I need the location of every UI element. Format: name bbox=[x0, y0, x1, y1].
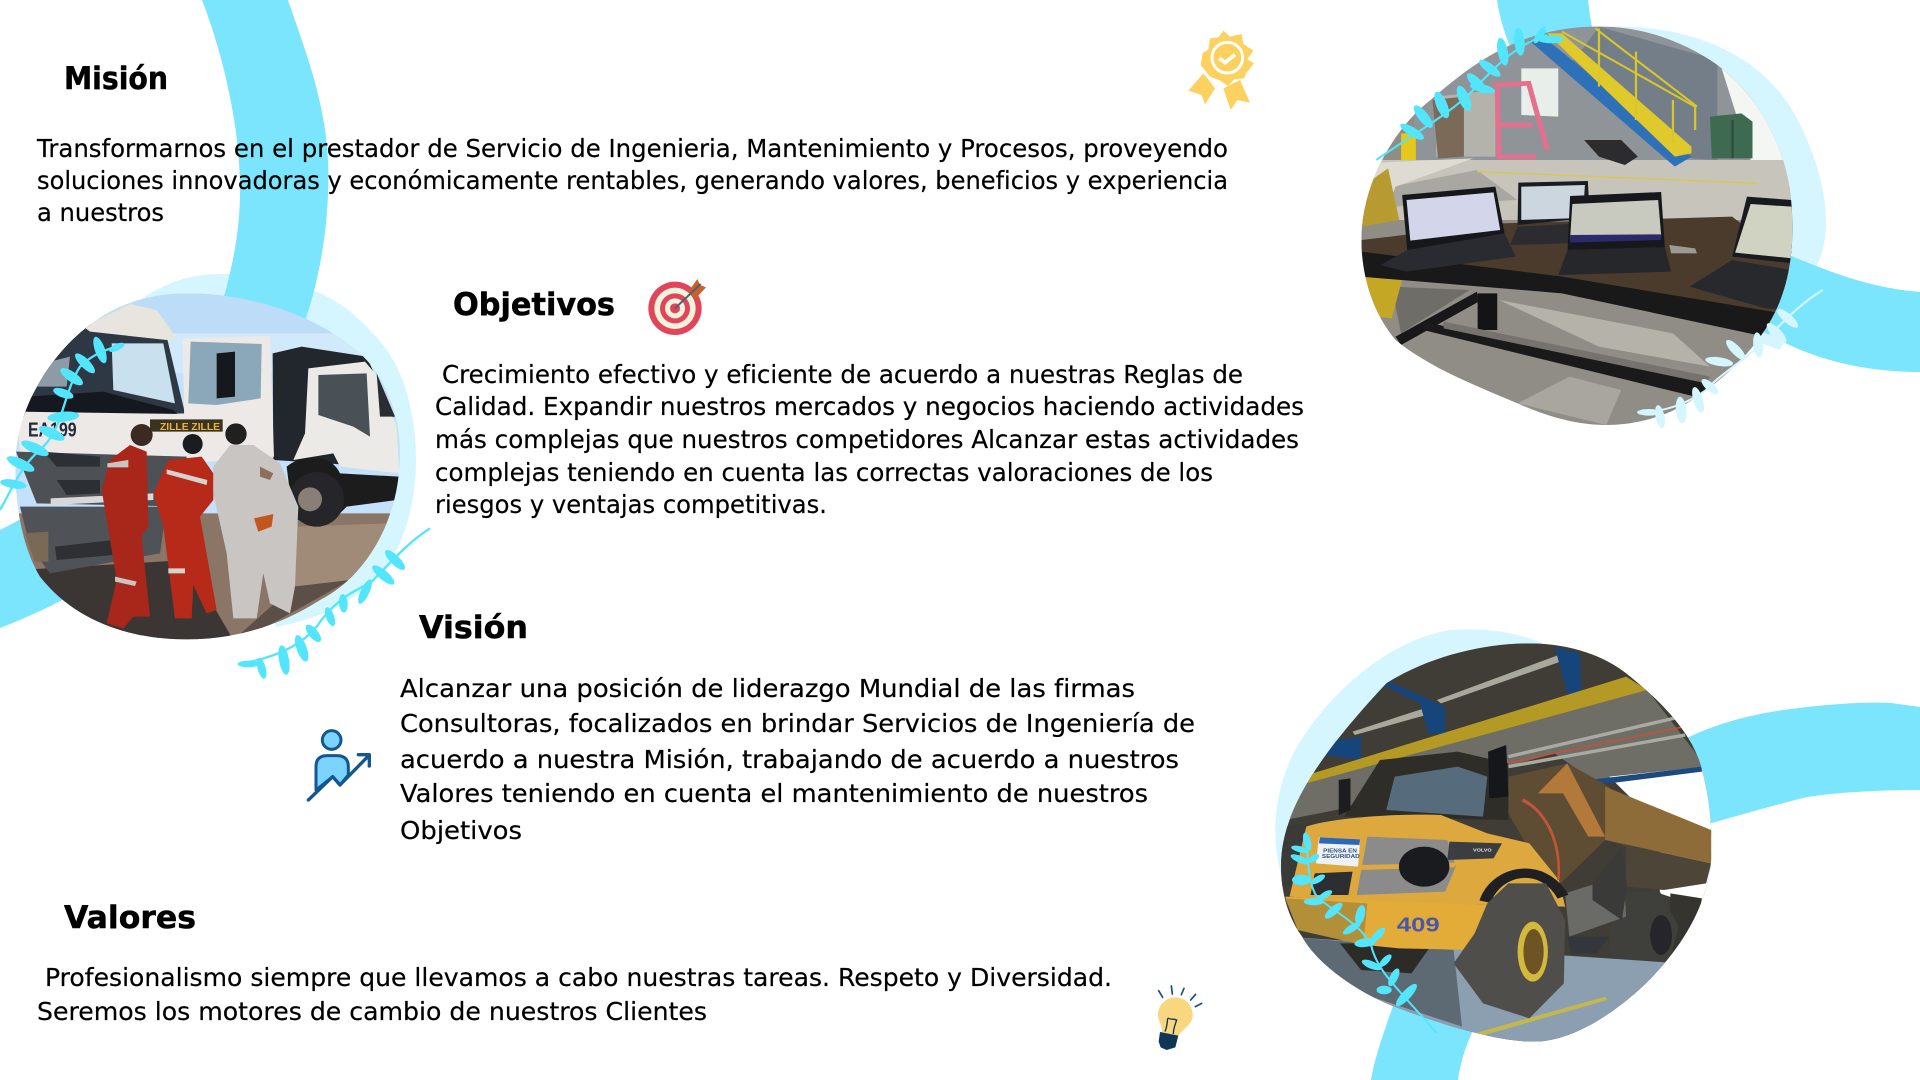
heading: Objetivos: Objetivos bbox=[453, 287, 615, 323]
text: Valores body: Profesionalismo siempre que llevamos a cabo nuestras tareas. Respeto y Diversidad. bbox=[45, 963, 1112, 992]
heading: Valores: Valores bbox=[64, 900, 196, 936]
left cab dark windshield bbox=[20, 323, 185, 417]
text: Misión body: soluciones innovadoras y económicamente rentables, generando valores, beneficios y experiencia bbox=[37, 166, 1228, 195]
sprig: bottom of laptops photo bbox=[1637, 290, 1823, 429]
photo: yellow dump truck: PIENSA EN bbox=[1323, 849, 1357, 854]
cyan band lower right bbox=[1660, 703, 1920, 835]
bins bbox=[1710, 113, 1753, 158]
icon: award rosette bbox=[1188, 31, 1254, 110]
photo: yellow dump truck: SEGURIDAD bbox=[1322, 854, 1360, 860]
text: Visión body: Valores teniendo en cuenta el mantenimiento de nuestros bbox=[400, 779, 1148, 808]
left yellow crate bbox=[1362, 168, 1399, 227]
heading: Misión: Misión bbox=[64, 61, 168, 97]
text: Objetivos body: riesgos y ventajas competitivas. bbox=[435, 490, 827, 519]
photo: yellow dump truck: VOLVO bbox=[1473, 848, 1492, 853]
cyan band bottom bbox=[1371, 1000, 1478, 1080]
grille bbox=[1357, 837, 1456, 895]
front tire bbox=[1454, 883, 1565, 1018]
text: Objetivos body: complejas teniendo en cuenta las correctas valoraciones de los bbox=[435, 458, 1213, 487]
text: Valores body bbox=[37, 963, 1112, 1026]
dump body bbox=[273, 347, 393, 467]
text: Misión body: Transformarnos en el prestador de Servicio de Ingenieria, Mantenimiento y Procesos, proveyendo bbox=[36, 134, 1228, 163]
ground bbox=[18, 513, 390, 640]
photo: workers and trucks: ZILLE ZILLE bbox=[160, 422, 221, 433]
yellow beam bbox=[1302, 677, 1647, 783]
cab bbox=[1344, 752, 1508, 820]
pink rack bbox=[1494, 83, 1547, 157]
right cab bbox=[293, 362, 399, 473]
hood bbox=[1289, 815, 1565, 907]
text: Visión body: Alcanzar una posición de liderazgo Mundial de las firmas bbox=[400, 674, 1135, 703]
table bbox=[1361, 217, 1792, 317]
photo: yellow dump truck: 409 bbox=[1397, 913, 1440, 936]
photo: yellow dump truck bbox=[1281, 643, 1712, 1042]
sprig: left of workers photo bbox=[0, 335, 126, 510]
text: Visión body: acuerdo a nuestra Misión, trabajando de acuerdo a nuestros bbox=[400, 745, 1179, 774]
back wall bbox=[1414, 27, 1754, 160]
icon: target with arrow bbox=[648, 279, 706, 335]
cyan band left bbox=[0, 0, 328, 628]
worker left bbox=[102, 445, 150, 628]
text: Objetivos body: más complejas que nuestros competidores Alcanzar estas actividades bbox=[435, 425, 1299, 454]
sprig: top of laptops photo bbox=[1376, 25, 1564, 160]
sprig: dump truck photo bbox=[1289, 832, 1437, 1033]
zille sign bbox=[150, 419, 223, 432]
chassis bbox=[1566, 884, 1626, 936]
text: Misión body bbox=[36, 134, 1228, 227]
visor bbox=[83, 304, 177, 340]
text: Objetivos body bbox=[435, 360, 1304, 519]
text: Visión body bbox=[400, 674, 1195, 845]
heading: Visión: Visión bbox=[419, 610, 528, 646]
photo: laptops on table bbox=[1362, 26, 1792, 425]
dark left bbox=[1281, 826, 1288, 886]
laptop 1 bbox=[1402, 187, 1505, 251]
sprig: below workers photo bbox=[238, 528, 430, 680]
worker white suit bbox=[213, 445, 298, 618]
text: Misión body: a nuestros bbox=[37, 198, 164, 227]
photo: workers and trucks bbox=[16, 294, 400, 640]
text: Valores body: Seremos los motores de cambio de nuestros Clientes bbox=[37, 997, 707, 1026]
photo: workers and trucks: EA199 bbox=[331, 440, 362, 455]
light blob behind dump truck photo bbox=[1275, 629, 1542, 875]
laptop 2 bbox=[1518, 181, 1589, 225]
cab body white bbox=[17, 412, 187, 460]
worker middle bbox=[153, 457, 217, 618]
text: Visión body: Objetivos bbox=[400, 816, 522, 845]
text: Visión body: Consultoras, focalizados en brindar Servicios de Ingeniería de bbox=[400, 709, 1195, 738]
icon: light bulb bbox=[1158, 986, 1202, 1050]
light blob behind truck photo bbox=[143, 274, 416, 627]
laptop 3 bbox=[1568, 192, 1665, 250]
ceiling stripes bbox=[1437, 653, 1565, 703]
sign bbox=[1316, 837, 1360, 867]
floor bbox=[1303, 938, 1665, 1042]
bright opening bbox=[1610, 767, 1712, 906]
EA199 labels: EA199 bbox=[28, 419, 77, 442]
text: Objetivos body: Calidad. Expandir nuestros mercados y negocios haciendo actividades bbox=[435, 392, 1304, 421]
rear tires bbox=[1670, 893, 1702, 960]
wheel bbox=[289, 472, 344, 527]
grille bbox=[16, 452, 187, 507]
fender bbox=[1485, 873, 1563, 902]
cyan band top right bbox=[1497, 0, 1920, 372]
floor bbox=[1362, 160, 1792, 220]
light blob behind laptops photo bbox=[1500, 26, 1826, 350]
laptop 4 bbox=[1732, 197, 1792, 263]
dump bed bbox=[1508, 763, 1609, 883]
bumper bbox=[20, 507, 167, 573]
wall below beam bbox=[1285, 690, 1706, 820]
icon: person with rising arrow bbox=[308, 731, 369, 800]
text: Objetivos body: Crecimiento efectivo y eficiente de acuerdo a nuestras Reglas de bbox=[442, 360, 1243, 389]
stairs bbox=[1529, 40, 1691, 167]
